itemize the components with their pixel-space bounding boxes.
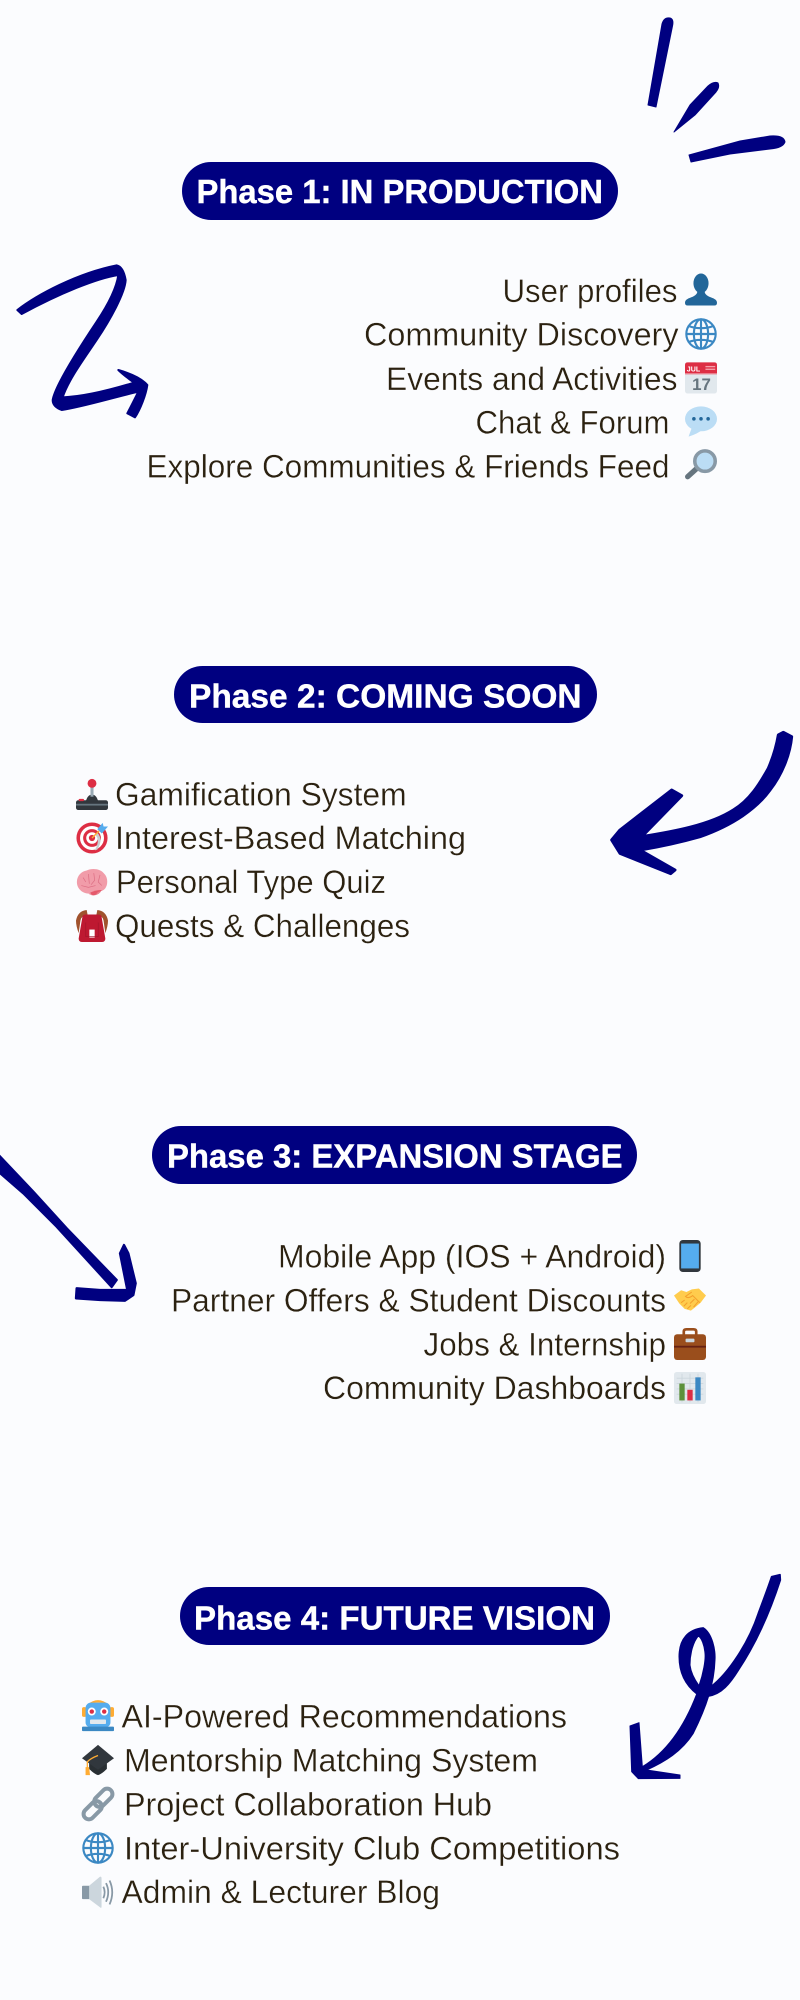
- icon: graduation cap: [82, 1745, 114, 1775]
- icon: person: [685, 274, 717, 306]
- item: mentorship matching: Mentorship Matching System: [124, 1743, 538, 1779]
- arrow: diagonal: [0, 1155, 136, 1301]
- item: ai recommendations: AI-Powered Recommendations: [122, 1699, 567, 1735]
- icon: backpack: [76, 910, 108, 942]
- item: chat and forum: Chat & Forum: [476, 404, 670, 440]
- icon: brain: [77, 869, 107, 895]
- heading: phase 3: Phase 3: EXPANSION STAGE: [167, 1138, 622, 1175]
- heading: phase 3: [152, 1126, 637, 1184]
- panel: phase 4: [81, 1575, 780, 1910]
- panel: phase 1: [17, 162, 717, 485]
- heading: phase 2: [174, 666, 597, 723]
- icon: joystick: [76, 779, 108, 810]
- decorative burst strokes: [648, 18, 785, 162]
- item: events and activities: Events and Activities: [386, 361, 678, 397]
- icon: globe: [83, 1833, 113, 1863]
- item: user profiles: User profiles: [502, 273, 678, 309]
- heading: phase 4: [180, 1587, 610, 1645]
- arrow: zigzag: [17, 265, 147, 417]
- icon: briefcase: [674, 1329, 706, 1360]
- item: quests and challenges: Quests & Challenges: [115, 908, 410, 944]
- item: community discovery: Community Discovery: [364, 316, 678, 352]
- panel: phase 2: [76, 666, 792, 944]
- heading: phase 2: Phase 2: COMING SOON: [189, 678, 582, 715]
- item: mobile app: Mobile App (IOS + Android): [278, 1239, 666, 1275]
- heading: phase 1: [182, 162, 618, 220]
- icon: calendar: 17: [692, 375, 711, 394]
- icon: target: [76, 822, 108, 854]
- icon: calendar: JUL: [687, 365, 701, 373]
- item: jobs and internship: Jobs & Internship: [424, 1327, 666, 1363]
- icon: speaker: [82, 1877, 112, 1908]
- item: community dashboards: Community Dashboards: [323, 1370, 666, 1406]
- panel: phase 3: [0, 1126, 706, 1406]
- icon: handshake: [674, 1288, 706, 1311]
- item: gamification system: Gamification System: [115, 777, 407, 813]
- item: inter-university: Inter-University Club Competitions: [124, 1830, 620, 1866]
- icon: globe: [686, 319, 716, 349]
- item: interest-based matching: Interest-Based Matching: [115, 820, 466, 856]
- item: partner offers: Partner Offers & Student Discounts: [171, 1283, 666, 1319]
- icon: magnifying glass: [688, 451, 715, 477]
- item: admin and lecturer blog: Admin & Lecturer Blog: [122, 1874, 440, 1910]
- icon: calendar: [685, 362, 717, 394]
- heading: phase 1: Phase 1: IN PRODUCTION: [196, 173, 603, 210]
- icon: speech bubble: [685, 406, 717, 437]
- heading: phase 4: Phase 4: FUTURE VISION: [194, 1599, 595, 1636]
- item: project collaboration: Project Collaboration Hub: [124, 1787, 492, 1823]
- item: explore communities: Explore Communities & Friends Feed: [146, 449, 670, 485]
- icon: robot: [82, 1701, 114, 1731]
- arrow: loop: [630, 1575, 780, 1779]
- icon: link: [81, 1786, 115, 1822]
- icon: bar chart: [674, 1372, 706, 1404]
- item: personal type quiz: Personal Type Quiz: [116, 864, 386, 900]
- icon: phone: [679, 1240, 701, 1272]
- arrow: curved left: [612, 732, 792, 874]
